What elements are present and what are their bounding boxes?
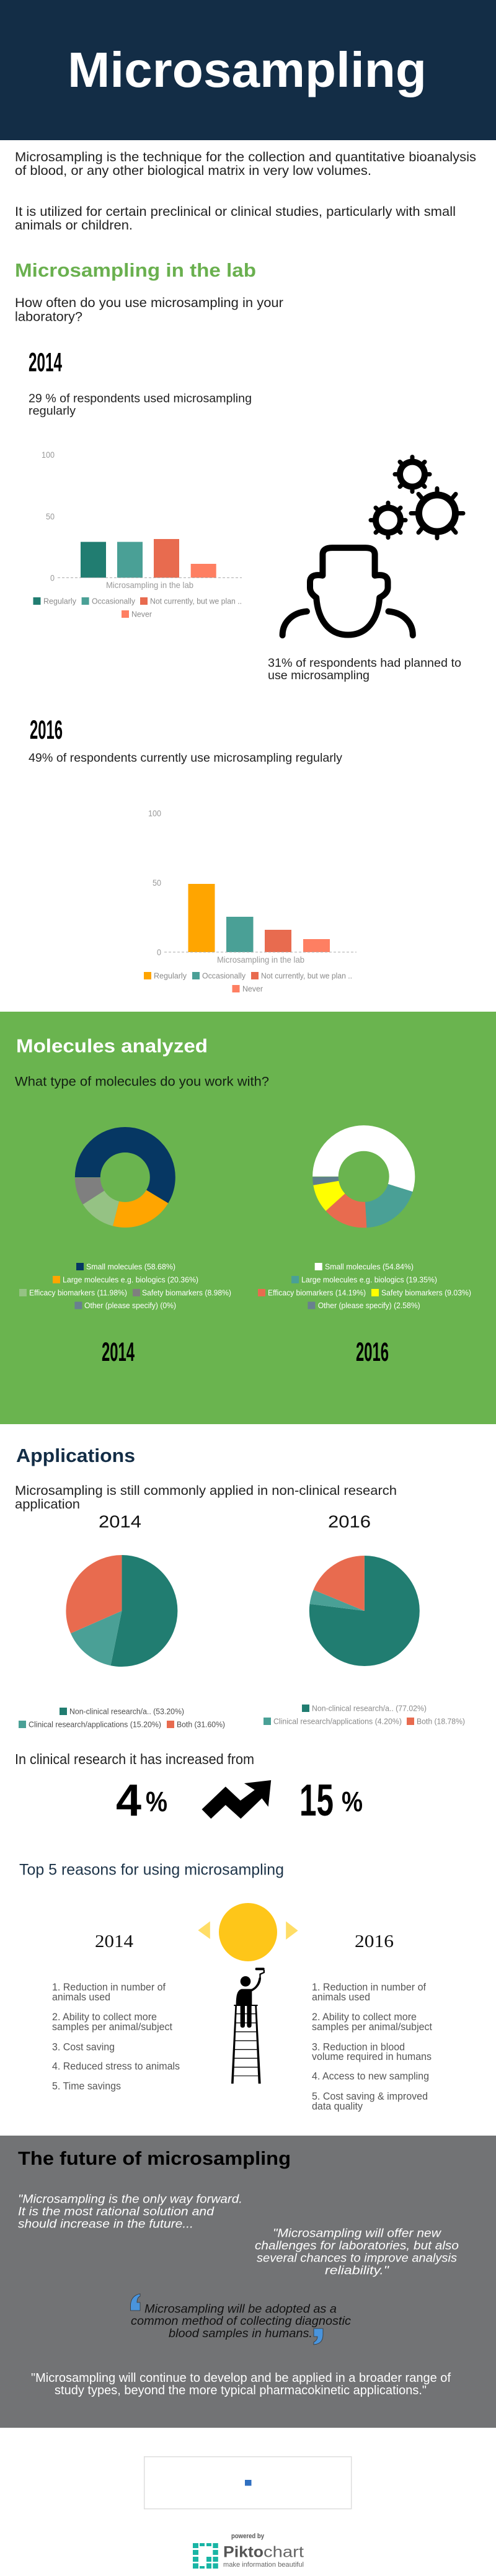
bar chart: 2014: 0 <box>50 573 55 582</box>
quote: diagnostic blood samples: common method of collecting diagnostic <box>131 2315 352 2328</box>
bar chart: 2016 <box>144 808 356 994</box>
legend: 2014 molecules: Other (please specify) (0%) <box>84 1301 176 1310</box>
quote: new challenges: several chances to improve analysis <box>257 2252 458 2265</box>
legend: 2014 bar chart: Occasionally <box>92 597 135 605</box>
text block: planned use <box>268 657 461 682</box>
legend: 2014 applications: Both (31.60%) <box>177 1719 225 1729</box>
text block: 2014 reasons list: 2. Ability to collect more <box>52 2011 157 2023</box>
statistic: 4 percent: % <box>146 1786 167 1817</box>
legend: 2016 applications: Both (18.78%) <box>417 1717 465 1726</box>
legend: 2014 applications <box>19 1707 225 1729</box>
bar chart: 2014 <box>33 450 242 619</box>
text block: 2014 reasons list: samples per animal/subject <box>52 2021 172 2033</box>
icon: painter on ladder <box>231 1968 265 2084</box>
bar chart: 2014: 50 <box>46 511 55 521</box>
pie chart: 2014 applications <box>94 1583 149 1639</box>
quote: only way forward <box>18 2193 242 2231</box>
legend: 2014 bar chart <box>33 597 242 619</box>
title: Microsampling <box>68 42 427 97</box>
heading: molecules analyzed: Molecules analyzed <box>16 1035 208 1056</box>
bar chart: 2014: Microsampling in the lab <box>106 580 193 590</box>
legend: 2014 applications: Clinical research/applications (15.20%) <box>29 1719 161 1729</box>
heading: the future: The future of microsampling <box>18 2147 291 2169</box>
icon: head outline <box>283 548 413 635</box>
text block: 2014 reasons list: 3. Cost saving <box>52 2041 115 2052</box>
donut chart: 2014 <box>87 1140 162 1214</box>
icon: sun with arrows <box>198 1903 298 1961</box>
legend: 2014 molecules: Small molecules (58.68%) <box>86 1262 175 1272</box>
quote: broader range of study types: study types, beyond the more typical pharmacokinetic applications." <box>55 2384 427 2397</box>
panel: the future of microsampling <box>0 2136 496 2428</box>
text block: 2014 reasons list: 4. Reduced stress to animals <box>52 2061 180 2072</box>
quote: broader range of study types <box>31 2371 451 2397</box>
heading: applications: Applications <box>16 1445 135 1466</box>
quote: diagnostic blood samples: Microsampling will be adopted as a <box>144 2302 337 2315</box>
footer logo: powered by piktochart: Pikto <box>223 2544 264 2561</box>
legend: 2016 molecules <box>258 1262 471 1310</box>
text block: 2014 regular use: regularly <box>29 405 76 418</box>
legend: 2014 molecules: Large molecules e.g. biologics (20.36%) <box>63 1275 198 1284</box>
text block: 2016 reasons list: samples per animal/subject <box>312 2021 432 2033</box>
text block: 2016 reasons list: 2. Ability to collect more <box>312 2011 417 2023</box>
label: 2016 molecules year: 2016 <box>356 1337 389 1367</box>
text block: 2016 reasons list: animals used <box>312 1991 370 2003</box>
legend: 2016 bar chart: Regularly <box>154 971 187 980</box>
heading: 2014: 2014 <box>29 348 62 378</box>
text block: 2014 reasons list: animals used <box>52 1991 110 2003</box>
text block: introduction: Microsampling is the technique for the collection and quantitative bioanalysis <box>15 150 476 164</box>
text block: 2016 reasons list: 5. Cost saving & improved <box>312 2090 428 2102</box>
text block: applications intro: Microsampling is still commonly applied in non-clinical research <box>15 1484 397 1498</box>
donut chart: 2016 <box>326 1138 402 1215</box>
footer logo: powered by piktochart <box>193 2533 304 2569</box>
statistic: 4 percent: 4 <box>116 1776 141 1825</box>
legend: 2014 molecules: Efficacy biomarkers (11.98%) <box>29 1288 127 1298</box>
quote: new challenges: challenges for laboratories, but also <box>255 2240 459 2253</box>
text block: 2014 reasons list: 1. Reduction in number of <box>52 1981 166 1993</box>
text block: 2016 regular use: 49% of respondents currently use microsampling regularly <box>29 752 343 765</box>
statistic: 4 percent <box>116 1776 167 1825</box>
legend: 2016 molecules: Large molecules e.g. biologics (19.35%) <box>301 1275 437 1284</box>
text block: 2016 reasons list: volume required in humans <box>312 2051 432 2062</box>
quote: diagnostic blood samples <box>131 2302 352 2340</box>
legend: 2016 molecules: Small molecules (54.84%) <box>325 1262 414 1272</box>
text block: 2016 reasons list: 4. Access to new sampling <box>312 2070 429 2082</box>
legend: 2014 bar chart: Never <box>131 609 153 619</box>
legend: 2016 applications: Clinical research/applications (4.20%) <box>273 1717 402 1726</box>
text block: introduction <box>15 150 476 233</box>
quote: only way forward: It is the most rational solution and <box>18 2206 215 2219</box>
label: 2014 pie year: 2014 <box>99 1512 141 1531</box>
legend: 2014 bar chart: Not currently, but we plan .. <box>150 597 242 605</box>
icon: opening quote mark <box>130 2294 140 2311</box>
text block: 2014 reasons list: 5. Time savings <box>52 2080 121 2092</box>
legend: 2016 bar chart <box>144 971 352 994</box>
text block: 2016 reasons list: data quality <box>312 2100 363 2112</box>
legend: 2016 bar chart: Occasionally <box>202 971 246 980</box>
icon: piktochart mark <box>193 2543 218 2569</box>
label: 2014 reasons year: 2014 <box>95 1932 134 1951</box>
legend: 2016 molecules: Efficacy biomarkers (14.19%) <box>268 1288 366 1298</box>
bar chart: 2014: 100 <box>42 450 55 460</box>
label: 2016 pie year: 2016 <box>328 1512 371 1531</box>
text block: planned use: use microsampling <box>268 669 370 682</box>
legend: 2016 applications <box>264 1703 465 1726</box>
bar chart: 2016: 100 <box>148 808 161 818</box>
placeholder image box <box>144 2457 352 2509</box>
icon: closing quote mark <box>314 2329 323 2345</box>
quote: new challenges <box>255 2227 459 2278</box>
quote: new challenges: "Microsampling will offer new <box>273 2227 441 2240</box>
icon: rising arrow <box>202 1780 271 1819</box>
bar chart: 2016: 50 <box>153 878 161 888</box>
text block: applications intro <box>15 1484 397 1512</box>
text block: 2016 reasons list <box>312 1981 432 2112</box>
footer logo: powered by piktochart: powered by <box>231 2533 265 2540</box>
quote: broader range of study types: "Microsampling will continue to develop and be applied in a broader range of <box>31 2371 451 2385</box>
footer logo: powered by piktochart: chart <box>264 2544 304 2561</box>
quote: only way forward: should increase in the future... <box>18 2218 193 2231</box>
bar chart: 2016: 0 <box>157 947 161 957</box>
label: 2016 reasons year: 2016 <box>355 1932 394 1951</box>
text block: molecules question: What type of molecules do you work with? <box>15 1075 269 1089</box>
legend: 2014 applications: Non-clinical research/a.. (53.20%) <box>69 1707 184 1716</box>
footer logo: powered by piktochart: make information beautiful <box>223 2561 304 2569</box>
pie chart: 2016 applications <box>337 1583 392 1639</box>
text block: 2016 reasons list: 3. Reduction in blood <box>312 2041 405 2052</box>
legend: 2014 molecules: Safety biomarkers (8.98%) <box>142 1288 231 1298</box>
text block: 2014 regular use <box>29 393 252 418</box>
heading: 2016: 2016 <box>30 715 63 745</box>
quote: only way forward: "Microsampling is the only way forward. <box>18 2193 242 2206</box>
text block: introduction: animals or children. <box>15 218 133 233</box>
text block: lab question <box>15 296 283 324</box>
heading: microsampling in the lab: Microsampling in the lab <box>15 259 256 281</box>
text block: 2014 reasons list <box>52 1981 180 2092</box>
heading: top 5 reasons: Top 5 reasons for using microsampling <box>19 1861 284 1878</box>
legend: 2014 molecules <box>19 1262 231 1310</box>
text block: 2016 reasons list: 1. Reduction in number of <box>312 1981 426 1993</box>
text block: lab question: laboratory? <box>15 310 82 324</box>
text block: 2014 regular use: 29 % of respondents used microsampling <box>29 393 252 406</box>
text block: lab question: How often do you use microsampling in your <box>15 296 283 310</box>
text block: clinical increase: In clinical research it has increased from <box>15 1751 254 1767</box>
legend: 2016 molecules: Safety biomarkers (9.03%) <box>381 1288 471 1298</box>
quote: diagnostic blood samples: blood samples in humans. <box>169 2327 312 2340</box>
legend: 2016 bar chart: Never <box>242 984 264 994</box>
legend: 2014 bar chart: Regularly <box>43 597 76 605</box>
panel: header banner <box>0 0 496 140</box>
text block: applications intro: application <box>15 1497 80 1512</box>
icon: three gears <box>371 457 463 538</box>
legend: 2016 bar chart: Not currently, but we plan .. <box>261 971 352 980</box>
icon: broken image <box>245 2480 252 2486</box>
panel: molecules analyzed <box>0 1012 496 1424</box>
quote: new challenges: reliability." <box>325 2265 390 2278</box>
text block: introduction: It is utilized for certain preclinical or clinical studies, particularly with small <box>15 205 456 219</box>
bar chart: 2016: Microsampling in the lab <box>217 955 304 965</box>
text block: planned use: 31% of respondents had planned to <box>268 657 461 670</box>
legend: 2016 applications: Non-clinical research/a.. (77.02%) <box>312 1703 427 1713</box>
text block: introduction: of blood, or any other biological matrix in very low volumes. <box>15 164 371 178</box>
statistic: 15 percent: 15 <box>299 1776 334 1825</box>
label: 2014 molecules year: 2014 <box>102 1337 135 1367</box>
statistic: 15 percent: % <box>342 1786 363 1817</box>
legend: 2016 molecules: Other (please specify) (2.58%) <box>318 1301 420 1310</box>
